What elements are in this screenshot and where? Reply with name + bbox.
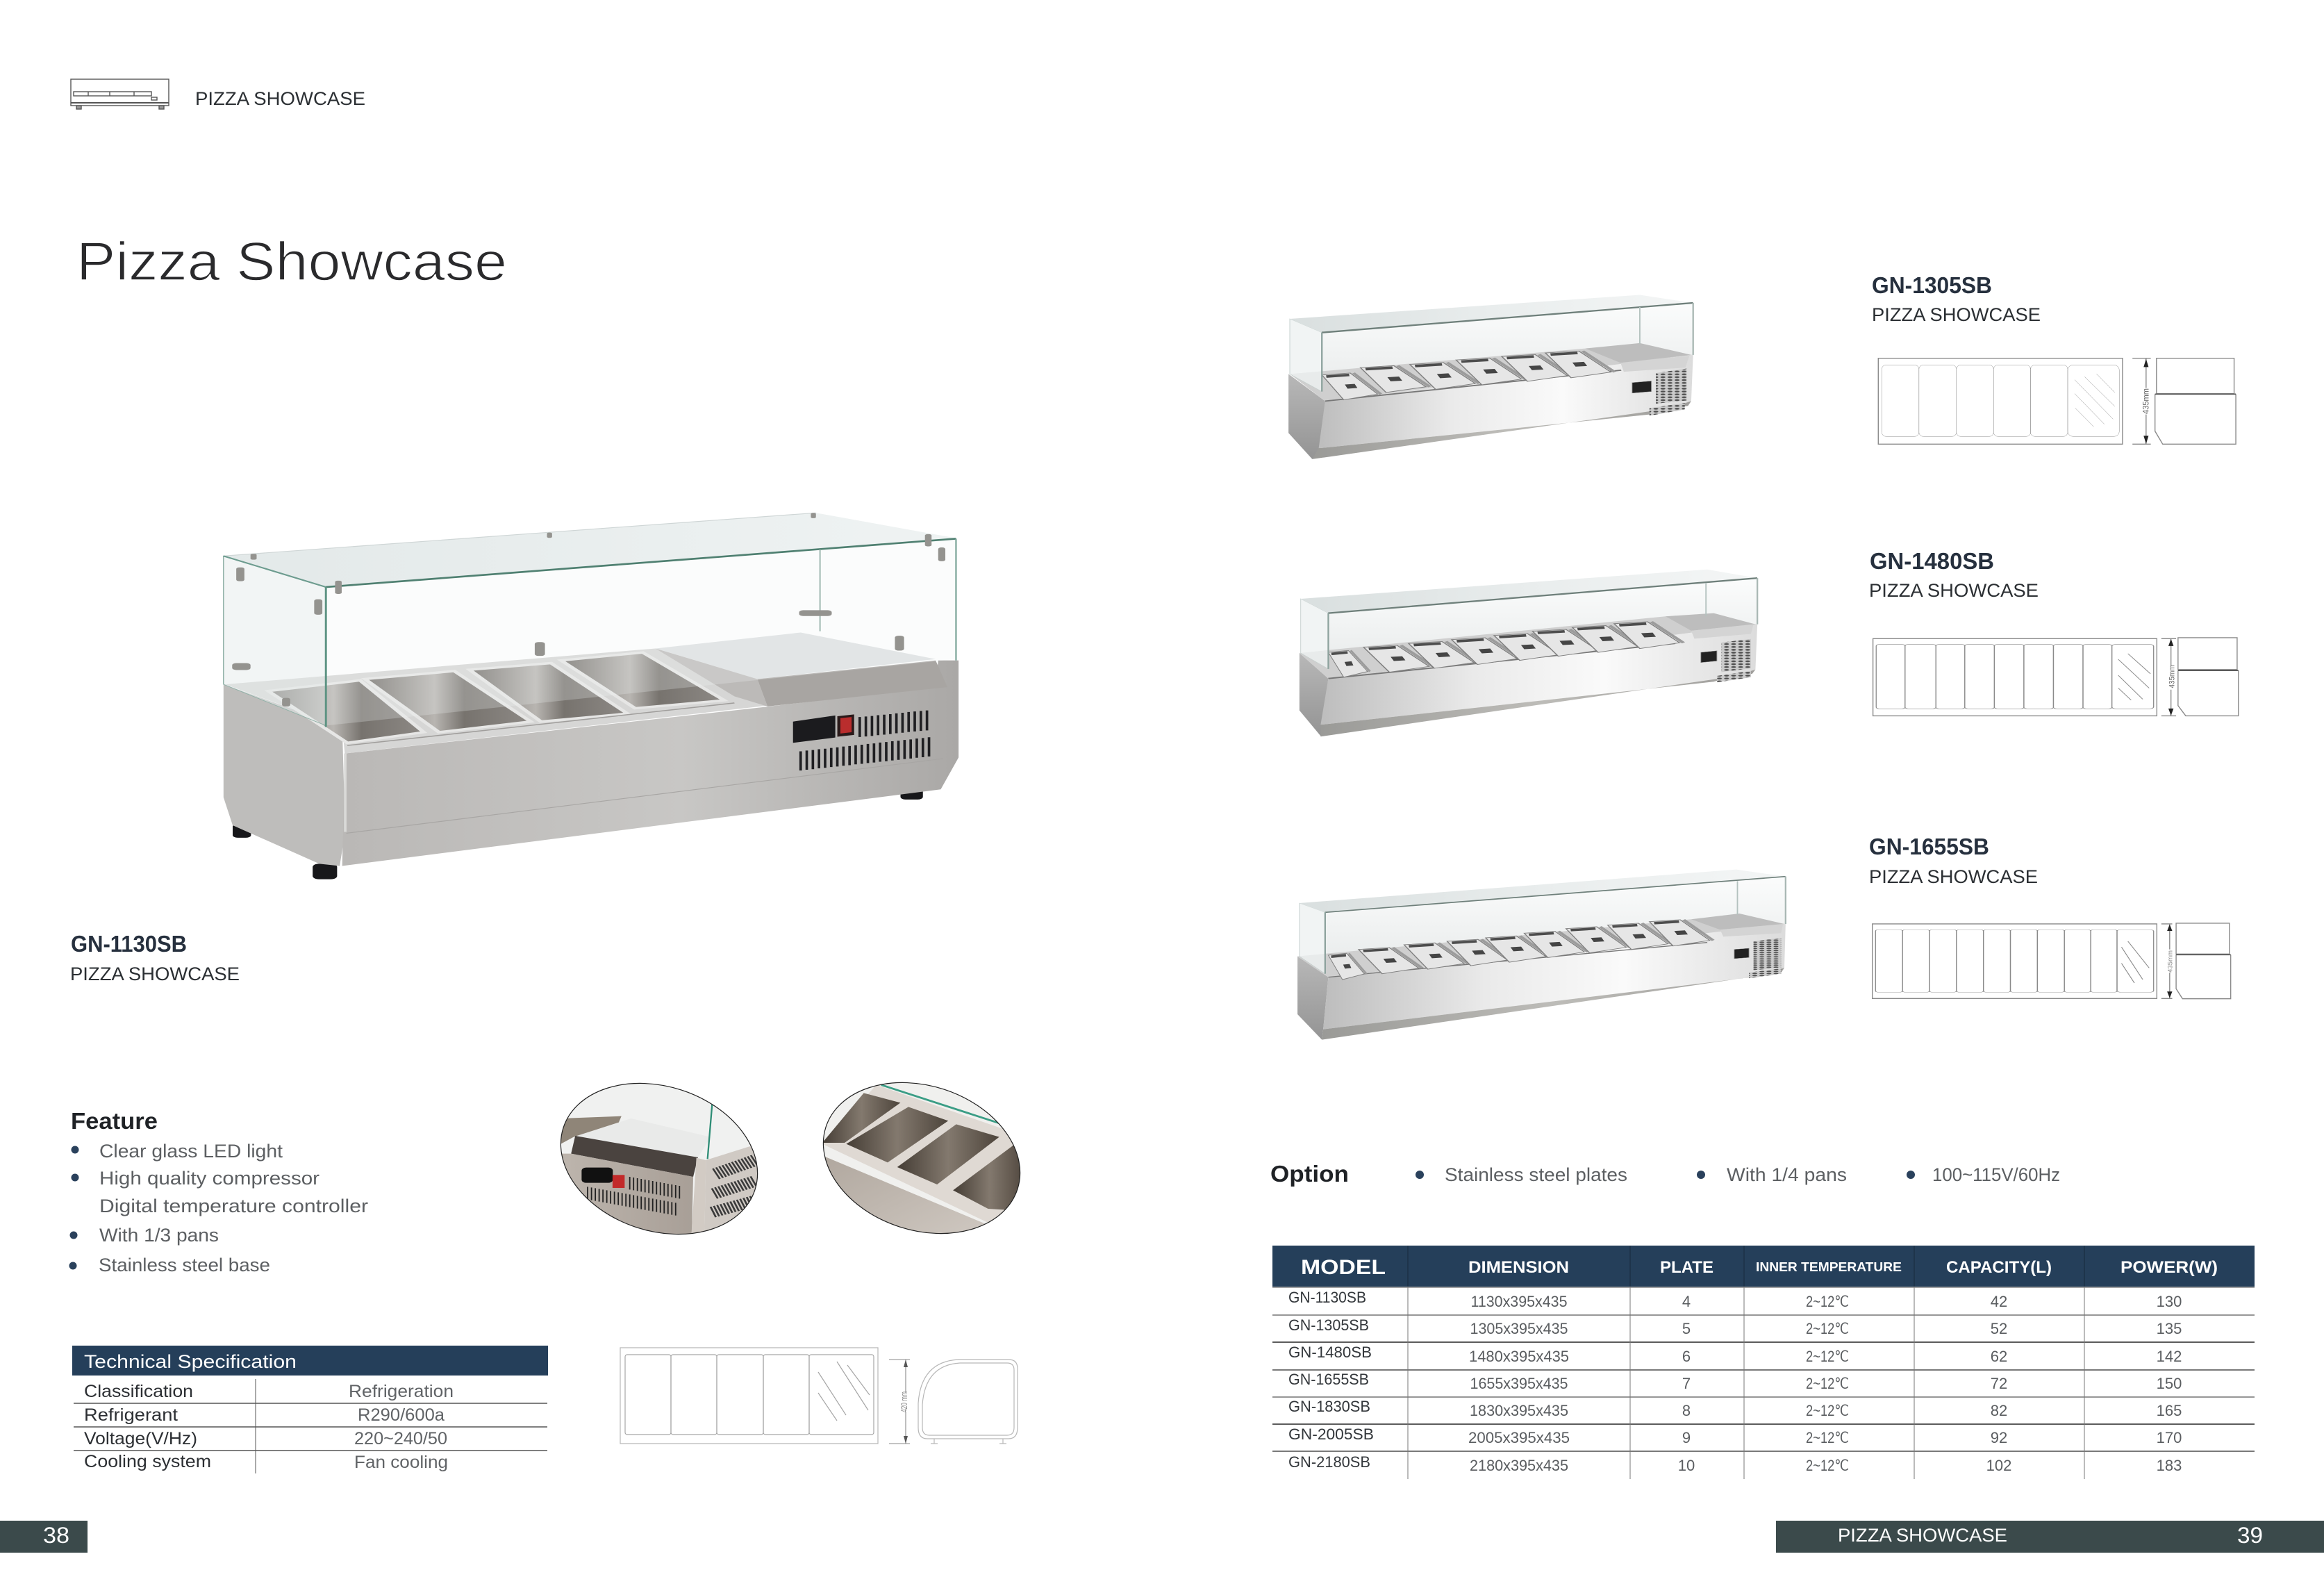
dimension 435mm: 435mm bbox=[2168, 665, 2176, 688]
capacity column: 52 bbox=[1991, 1320, 2007, 1337]
spec header bbox=[72, 1346, 548, 1376]
dimension column: 1830x395x435 bbox=[1470, 1402, 1568, 1419]
inner temperature column bbox=[1806, 1293, 1849, 1474]
dimension 435mm bbox=[2161, 638, 2176, 716]
power column: 130 bbox=[2157, 1293, 2182, 1310]
steel body bbox=[224, 661, 958, 866]
page number 38 bbox=[0, 1521, 88, 1553]
title: Pizza Showcase bbox=[76, 231, 507, 292]
technical drawing: GN-1655SB bbox=[1873, 923, 2231, 999]
glass canopy bbox=[224, 513, 956, 727]
inner temperature column: 2~12℃ bbox=[1806, 1375, 1849, 1392]
detail photo: pans bbox=[822, 1082, 1021, 1234]
feature heading: Feature bbox=[71, 1108, 158, 1134]
model type: GN-1480SB: PIZZA SHOWCASE bbox=[1869, 580, 2039, 601]
feature items: With 1/3 pans bbox=[99, 1225, 219, 1246]
shelf cover bbox=[656, 632, 947, 707]
power column: 170 bbox=[2157, 1429, 2182, 1446]
technical drawing: GN-1130SB bbox=[620, 1348, 1018, 1444]
capacity column bbox=[1986, 1293, 2011, 1474]
deck and pans bbox=[225, 648, 767, 754]
capacity column: 82 bbox=[1991, 1402, 2007, 1419]
spec labels: Classification bbox=[84, 1382, 193, 1401]
dimension column: 2180x395x435 bbox=[1470, 1457, 1568, 1474]
model column: GN-2005SB bbox=[1288, 1426, 1374, 1443]
model type: GN-1655SB: PIZZA SHOWCASE bbox=[1869, 866, 2038, 887]
table header: MODEL bbox=[1301, 1256, 1386, 1279]
glass clips bbox=[232, 513, 945, 707]
dimension column: 2005x395x435 bbox=[1468, 1429, 1570, 1446]
power column bbox=[2157, 1293, 2182, 1474]
feature list bbox=[69, 1108, 368, 1275]
table grid bbox=[1272, 1287, 2255, 1479]
dimension 420 mm bbox=[889, 1360, 910, 1444]
spec labels: Refrigerant bbox=[84, 1405, 178, 1425]
footer bar with page number 39: 39 bbox=[2237, 1523, 2263, 1548]
footer bar with page number 39: PIZZA SHOWCASE bbox=[1838, 1525, 2007, 1546]
inner temperature column: 2~12℃ bbox=[1806, 1293, 1849, 1310]
detail photo: control panel bbox=[560, 1082, 758, 1235]
spec labels: Voltage(V/Hz) bbox=[84, 1429, 197, 1448]
feature items: Clear glass LED light bbox=[99, 1141, 283, 1162]
dimension mark bbox=[2161, 924, 2174, 998]
plate column: 5 bbox=[1682, 1320, 1691, 1337]
feature items: Stainless steel base bbox=[99, 1255, 270, 1275]
spec labels: Cooling system bbox=[84, 1452, 211, 1471]
model name: GN-1480SB: GN-1480SB bbox=[1870, 548, 1994, 574]
option bullets bbox=[1416, 1171, 1915, 1179]
inner temperature column: 2~12℃ bbox=[1806, 1457, 1849, 1474]
spec values: R290/600a bbox=[358, 1405, 445, 1425]
model type: GN-1305SB: PIZZA SHOWCASE bbox=[1872, 304, 2041, 325]
inner temperature column: 2~12℃ bbox=[1806, 1320, 1849, 1337]
capacity column: 72 bbox=[1991, 1375, 2007, 1392]
feature items bbox=[99, 1141, 368, 1275]
table header: PLATE bbox=[1660, 1258, 1713, 1277]
model column: GN-2180SB bbox=[1288, 1453, 1370, 1471]
model column: GN-1830SB bbox=[1288, 1398, 1370, 1415]
feature items: Digital temperature controller bbox=[99, 1196, 368, 1216]
side view bbox=[2178, 638, 2239, 716]
power column: 183 bbox=[2157, 1457, 2182, 1474]
inner temperature column: 2~12℃ bbox=[1806, 1348, 1849, 1365]
power column: 165 bbox=[2157, 1402, 2182, 1419]
capacity column: 62 bbox=[1991, 1348, 2007, 1365]
side view bbox=[2155, 358, 2236, 444]
product photo: GN-1655SB bbox=[1297, 870, 1786, 1040]
model column: GN-1480SB bbox=[1288, 1344, 1372, 1361]
capacity column: 92 bbox=[1991, 1429, 2007, 1446]
technical drawing: GN-1305SB bbox=[1878, 358, 2236, 444]
feature items: High quality compressor bbox=[99, 1168, 319, 1189]
dimension column bbox=[1468, 1293, 1570, 1474]
product photo: GN-1305SB bbox=[1288, 295, 1693, 459]
plate column: 10 bbox=[1678, 1457, 1695, 1474]
power column: 142 bbox=[2157, 1348, 2182, 1365]
dimension column: 1305x395x435 bbox=[1470, 1320, 1568, 1337]
model type: GN-1130SB: PIZZA SHOWCASE bbox=[70, 964, 240, 984]
table header bbox=[1272, 1246, 2255, 1287]
model column: GN-1130SB bbox=[1288, 1289, 1366, 1306]
plate column: 4 bbox=[1682, 1293, 1691, 1310]
technical specification table bbox=[72, 1346, 548, 1473]
plate column: 9 bbox=[1682, 1429, 1691, 1446]
section label: PIZZA SHOWCASE bbox=[195, 88, 365, 109]
feature bullets bbox=[69, 1146, 79, 1270]
table header: INNER TEMPERATURE bbox=[1756, 1260, 1902, 1274]
model column: GN-1305SB bbox=[1288, 1316, 1369, 1334]
dimension 435mm: 435mm bbox=[2141, 388, 2150, 414]
dimension mark: 435mm bbox=[2167, 950, 2174, 973]
table header: POWER(W) bbox=[2120, 1258, 2218, 1277]
product photo: GN-1130SB main cabinet bbox=[224, 513, 958, 879]
dimension 435mm bbox=[2132, 358, 2151, 444]
spec grid bbox=[74, 1379, 547, 1473]
plate column bbox=[1678, 1293, 1695, 1474]
dimension column: 1130x395x435 bbox=[1471, 1293, 1567, 1310]
model column bbox=[1288, 1289, 1374, 1471]
model comparison table bbox=[1272, 1246, 2255, 1479]
side view bbox=[2176, 923, 2231, 999]
control panel and vents bbox=[793, 711, 929, 770]
option heading: Option bbox=[1270, 1161, 1349, 1187]
plate column: 8 bbox=[1682, 1402, 1691, 1419]
technical drawing: GN-1480SB bbox=[1873, 638, 2239, 716]
model name: GN-1655SB: GN-1655SB bbox=[1869, 834, 1989, 859]
option items bbox=[1445, 1164, 2060, 1185]
option items: Stainless steel plates bbox=[1445, 1164, 1627, 1185]
spec values: Refrigeration bbox=[349, 1382, 454, 1401]
icon: showcase line icon bbox=[71, 79, 169, 109]
spec heading: Technical Specification bbox=[84, 1351, 297, 1372]
dimension 420 mm: 420 mm bbox=[899, 1391, 909, 1412]
dimension column: 1480x395x435 bbox=[1469, 1348, 1569, 1365]
inner temperature column: 2~12℃ bbox=[1806, 1402, 1849, 1419]
side profile bbox=[918, 1360, 1018, 1444]
table header: DIMENSION bbox=[1468, 1258, 1569, 1277]
option row bbox=[1270, 1161, 2060, 1187]
power column: 135 bbox=[2157, 1320, 2182, 1337]
spec labels bbox=[84, 1382, 211, 1471]
footer bar with page number 39 bbox=[1776, 1521, 2324, 1553]
capacity column: 102 bbox=[1986, 1457, 2011, 1474]
plate column: 7 bbox=[1682, 1375, 1691, 1392]
spec values bbox=[349, 1382, 454, 1472]
plate column: 6 bbox=[1682, 1348, 1691, 1365]
spec values: Fan cooling bbox=[354, 1453, 448, 1472]
option items: 100~115V/60Hz bbox=[1932, 1164, 2060, 1185]
inner temperature column: 2~12℃ bbox=[1806, 1429, 1849, 1446]
capacity column: 42 bbox=[1991, 1293, 2007, 1310]
page number 38: 38 bbox=[43, 1523, 69, 1548]
dimension column: 1655x395x435 bbox=[1470, 1375, 1568, 1392]
power column: 150 bbox=[2157, 1375, 2182, 1392]
option items: With 1/4 pans bbox=[1727, 1164, 1847, 1185]
spec values: 220~240/50 bbox=[354, 1429, 447, 1448]
product photo: GN-1480SB bbox=[1300, 570, 1757, 736]
table header: CAPACITY(L) bbox=[1946, 1258, 2052, 1277]
model name: GN-1130SB: GN-1130SB bbox=[71, 931, 187, 957]
feet bbox=[233, 786, 923, 879]
model column: GN-1655SB bbox=[1288, 1371, 1369, 1388]
model name: GN-1305SB: GN-1305SB bbox=[1872, 272, 1992, 298]
